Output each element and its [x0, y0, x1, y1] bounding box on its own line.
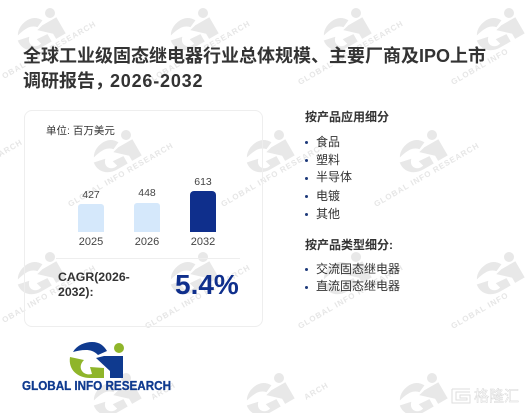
- value 2026: 448: [138, 187, 156, 199]
- watermark pattern: GLOBAL INFO RESEARCH: [296, 19, 405, 87]
- watermark pattern: OBAL INFO RESEARCH: [1, 263, 98, 325]
- watermark pattern: GLOBAL INFO: [450, 291, 510, 331]
- icon: Gelonghui G: [452, 389, 470, 403]
- bullet: [305, 177, 308, 180]
- watermark pattern: GLOBAL INFO RESEARCH: [144, 263, 252, 331]
- year 2032: 2032: [191, 236, 215, 248]
- item: 食品: [316, 135, 340, 149]
- logo: Global Info Research: [22, 342, 171, 393]
- title: [23, 46, 486, 91]
- bar 2026: [134, 203, 160, 232]
- title: 调研报告，2026-2032: [23, 71, 203, 91]
- watermark pattern: ARCH: [150, 381, 177, 402]
- item: 半导体: [316, 170, 352, 184]
- bullet: [305, 268, 308, 271]
- year 2026: 2026: [135, 236, 159, 248]
- watermark pattern: GLOBAL INFO RESEARCH: [220, 141, 328, 209]
- item: 交流固态继电器: [316, 262, 400, 276]
- heading: by type: 按产品类型细分:: [305, 238, 393, 252]
- watermark pattern: GLOBAL INFO RESEARCH: [372, 141, 481, 209]
- item: 其他: [316, 207, 340, 221]
- watermark pattern: OBAL INFO RESEARCH: [1, 19, 98, 81]
- watermark text: 格隆汇: [474, 385, 519, 406]
- watermark pattern: ARCH: [302, 381, 330, 402]
- item: 电镀: [316, 189, 340, 203]
- watermark pattern: GLOBAL INFO RESEARCH: [296, 263, 405, 331]
- bar 2025: [78, 204, 104, 232]
- CAGR value: 5.4%: [175, 269, 239, 300]
- list: applications: [305, 135, 352, 221]
- value 2025: 427: [82, 189, 100, 201]
- year 2025: 2025: [79, 236, 103, 248]
- watermark pattern: GLOBAL INFO RESEARCH: [144, 19, 252, 87]
- bullet: [305, 286, 308, 289]
- watermark: Gelonghui: [452, 385, 519, 406]
- icon: G lower: [70, 357, 104, 378]
- CAGR label: CAGR(2026-: [58, 270, 130, 284]
- CAGR label: [58, 270, 130, 299]
- bullet: [305, 159, 308, 162]
- bullet: [305, 141, 308, 144]
- heading: by application: 按产品应用细分: [305, 110, 389, 124]
- icon: G arc: [73, 342, 107, 355]
- title: 全球工业级固态继电器行业总体规模、主要厂商及IPO上市: [23, 46, 486, 66]
- watermark pattern: GLOBAL INFO: [450, 47, 510, 87]
- item: 塑料: [316, 153, 340, 167]
- bullet: [305, 195, 308, 198]
- bar 2032: [190, 191, 216, 232]
- bar chart: [78, 176, 216, 248]
- icon: i stem: [96, 356, 123, 378]
- panel: market size card: [24, 110, 263, 327]
- value 2032: 613: [194, 176, 212, 188]
- list: types: [305, 262, 400, 293]
- item: 直流固态继电器: [316, 279, 400, 293]
- unit label: 单位: 百万美元: [46, 125, 115, 137]
- CAGR label: 2032):: [58, 285, 94, 299]
- bullet: [305, 213, 308, 216]
- icon: i dot: [114, 343, 124, 353]
- watermark pattern: GLOBAL INFO RESEARCH: [66, 141, 175, 209]
